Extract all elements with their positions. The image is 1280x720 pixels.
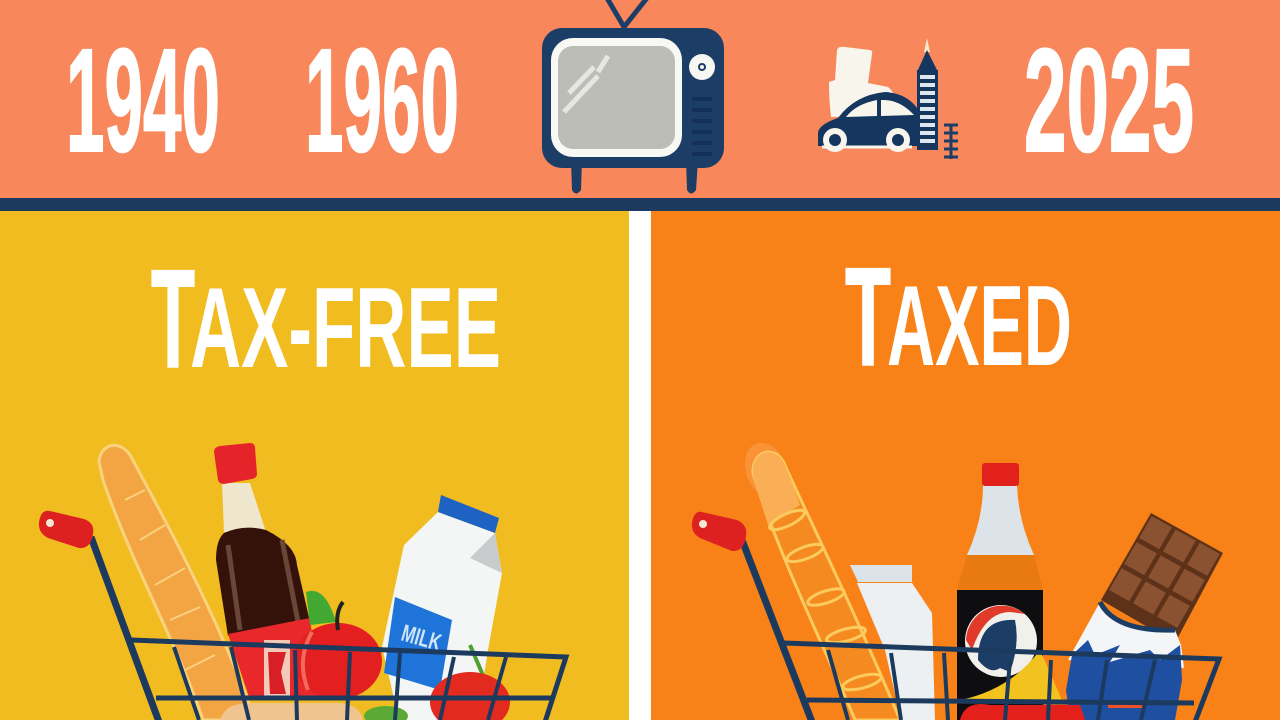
icon: shopping cart [39, 511, 566, 720]
heading: Tax-free [151, 240, 501, 397]
icon: milk carton [382, 495, 502, 720]
panel: tax-free [0, 211, 629, 720]
food in basket [220, 645, 510, 720]
icon: baguette [738, 437, 900, 720]
milk label: MILK [398, 620, 445, 657]
heading: Taxed [845, 238, 1072, 395]
icon: retro television [542, 0, 724, 194]
icon: soda bottle [214, 443, 382, 700]
heading: Tax-free: AX-FREE [190, 265, 501, 392]
icon: shopping cart [692, 512, 1219, 720]
icon: chocolate bar [1066, 513, 1223, 720]
heading: Tax-free: T [151, 240, 195, 397]
panel: timeline header: 1960 [305, 19, 459, 183]
panel: timeline header [0, 0, 1280, 198]
panel: timeline header: 1940 [66, 19, 220, 183]
bottle logo [965, 605, 1037, 677]
divider band [0, 198, 1280, 211]
heading: Taxed: AXED [887, 263, 1072, 390]
heading: Taxed: T [845, 238, 891, 395]
icon: soda bottle with logo [957, 463, 1043, 720]
icon: car, appliance and city tower [818, 38, 958, 159]
icon: apple [294, 591, 382, 699]
white gutter [629, 211, 651, 720]
icon: milk carton [850, 565, 935, 720]
fruit in basket [960, 650, 1143, 720]
panel: taxed [651, 211, 1280, 720]
icon: baguette [99, 445, 255, 720]
